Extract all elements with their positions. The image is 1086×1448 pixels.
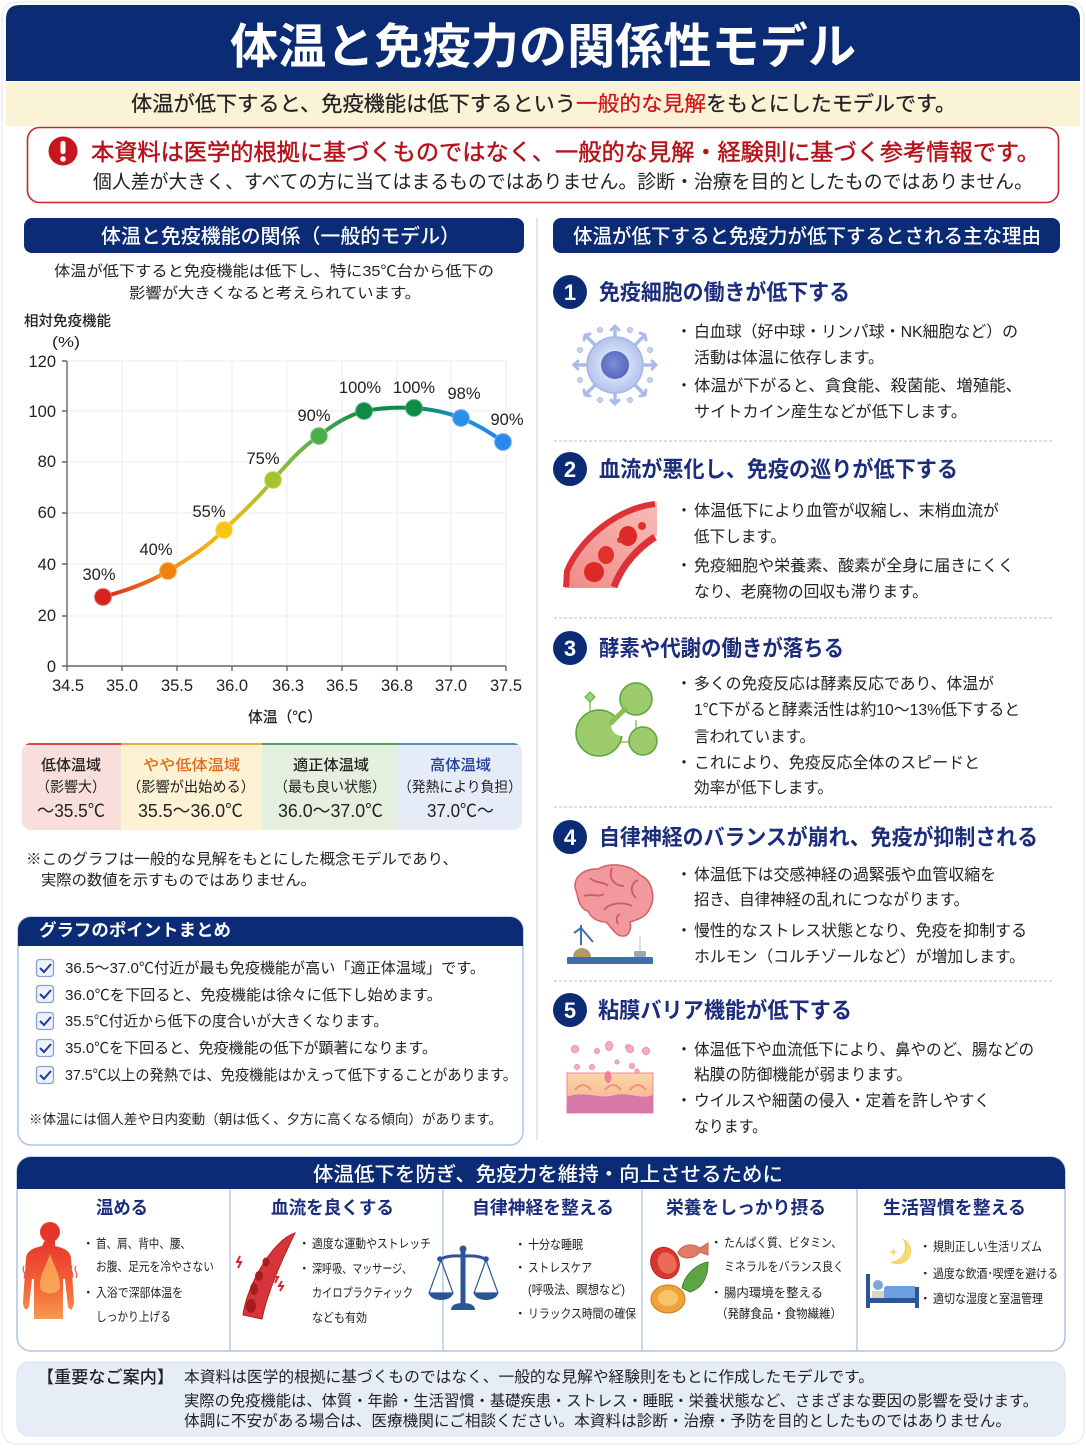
- zone: low: （影響大）: [36, 779, 106, 796]
- title banner: [6, 5, 1080, 81]
- column: nutrition: [646, 1197, 844, 1321]
- reason text: ホルモン（コルチゾールなど）が増加します。: [694, 948, 1025, 966]
- column: warm: 首、肩、背中、腰、: [96, 1236, 191, 1251]
- reason text: ・: [676, 867, 692, 884]
- reason text: [676, 1041, 1034, 1136]
- checklist: 37.5℃以上の発熱では、免疫機能はかえって低下することがあります。: [65, 1067, 517, 1084]
- x axis labels: 36.3: [272, 677, 304, 695]
- number badge: 5: [564, 998, 576, 1023]
- icon: exclamation: [48, 136, 78, 166]
- column: circulation: [237, 1198, 431, 1325]
- column: lifestyle: 規則正しい生活リズム: [933, 1239, 1042, 1254]
- y axis labels: 100: [28, 403, 56, 421]
- panel: left heading: [24, 218, 524, 253]
- checklist: 36.0℃を下回ると、免疫機能は徐々に低下し始めます。: [65, 987, 442, 1004]
- reason text: ・: [676, 755, 692, 772]
- reason heading: 血流が悪化し、免疫の巡りが低下する: [599, 457, 958, 482]
- zone: optimal: 36.0～37.0℃: [278, 801, 383, 821]
- notice label: 【重要なご案内】: [37, 1368, 174, 1387]
- column: lifestyle: 過度な飲酒･喫煙を避ける: [933, 1266, 1058, 1281]
- reason text: ・: [676, 558, 692, 575]
- column: circulation: なども有効: [312, 1311, 367, 1325]
- column: nutrition: たんぱく質、ビタミン、: [724, 1235, 842, 1250]
- reason text: 招き、自律神経の乱れにつながります。: [694, 891, 969, 909]
- x axis labels: 37.0: [435, 677, 467, 695]
- icon: brain: [567, 865, 653, 964]
- reason text: 低下します。: [694, 528, 786, 546]
- subtitle band: をもとにしたモデルです。: [706, 93, 956, 116]
- data labels: 90%: [490, 411, 524, 429]
- reason text: 多くの免疫反応は酵素反応であり、体温が: [694, 675, 994, 693]
- zone: low: 低体温域: [41, 757, 101, 774]
- y axis labels: 60: [38, 504, 56, 522]
- column: warm: [23, 1198, 214, 1324]
- notice text: 体調に不安がある場合は、医療機関にご相談ください。本資料は診断・治療・予防を目的としたものではありません。: [184, 1412, 1011, 1430]
- chart description: 影響が大きくなると考えられています。: [129, 285, 421, 302]
- reason text: 体温低下や血流低下により、鼻やのど、腸などの: [694, 1041, 1034, 1059]
- column: circulation: 深呼吸、マッサージ、: [312, 1262, 412, 1276]
- column: warm: しっかり上げる: [96, 1310, 171, 1324]
- reason text: 慢性的なストレス状態となり、免疫を抑制する: [694, 921, 1027, 940]
- icon: scales: [429, 1246, 498, 1310]
- data labels: 40%: [139, 541, 173, 559]
- icon: food: [646, 1243, 708, 1313]
- reason text: 効率が低下します。: [694, 779, 833, 797]
- icon: enzyme: [576, 683, 657, 756]
- x axis labels: 36.5: [326, 677, 358, 695]
- reason 3: [553, 631, 1020, 797]
- zone: slightly low: （影響が出始める）: [127, 779, 255, 796]
- reason text: ・: [676, 1042, 692, 1059]
- column: circulation: 血流を良くする: [271, 1198, 394, 1218]
- number badge: 1: [564, 280, 576, 305]
- data labels: 75%: [246, 450, 280, 468]
- number badge: [553, 993, 587, 1027]
- chart description: [54, 263, 494, 302]
- chart description: 体温が低下すると免疫機能は低下し、特に35℃台から低下の: [54, 263, 494, 280]
- zone: high: [398, 757, 522, 821]
- number badge: [553, 452, 587, 486]
- reason text: なります。: [694, 1118, 767, 1136]
- column: circulation: 適度な運動やストレッチ: [312, 1236, 431, 1251]
- column: warm: お腹、足元を冷やさない: [96, 1260, 214, 1274]
- y axis labels: 20: [38, 607, 56, 625]
- line chart: [24, 312, 524, 726]
- reason text: 活動は体温に依存します。: [694, 349, 884, 367]
- data labels: 100%: [393, 379, 435, 397]
- reason heading: 免疫細胞の働きが低下する: [599, 280, 850, 305]
- column: autonomic: ・: [514, 1238, 527, 1252]
- column: nutrition: ミネラルをバランス良く: [724, 1259, 844, 1274]
- reason text: 1℃下がると酵素活性は約10～13%低下すると: [694, 701, 1020, 719]
- data labels: 55%: [192, 503, 226, 521]
- data points: [94, 400, 512, 606]
- data labels: 98%: [447, 385, 481, 403]
- icon: mucosa: [567, 1042, 653, 1113]
- reason text: 免疫細胞や栄養素、酸素が全身に届きにくく: [694, 557, 1014, 575]
- reason text: これにより、免疫反応全体のスピードと: [694, 754, 980, 772]
- column: circulation: ・: [298, 1237, 311, 1251]
- y axis labels: 40: [38, 556, 56, 574]
- y axis labels: 80: [38, 453, 56, 471]
- data labels: 100%: [339, 379, 381, 397]
- important notice: [17, 1362, 1065, 1436]
- zone: slightly low: やや低体温域: [143, 757, 240, 774]
- column: autonomic: (呼吸法、瞑想など): [528, 1282, 625, 1297]
- x axis labels: 36.0: [216, 677, 248, 695]
- notice text: [184, 1367, 1038, 1430]
- subtitle band: [6, 82, 1080, 126]
- reason 2: [553, 452, 1014, 601]
- reason text: 白血球（好中球・リンパ球・NK細胞など）の: [694, 323, 1018, 341]
- reason heading: 自律神経のバランスが崩れ、免疫が抑制される: [599, 825, 1038, 850]
- column: nutrition: 栄養をしっかり摂る: [666, 1197, 826, 1218]
- column: warm: ・: [82, 1286, 95, 1300]
- title: 体温と免疫力の関係性モデル: [230, 21, 856, 74]
- x axis title: 体温（℃）: [248, 709, 322, 726]
- x axis labels: 36.8: [381, 677, 413, 695]
- notice text: 実際の免疫機能は、体質・年齢・生活習慣・基礎疾患・ストレス・睡眠・栄養状態など、さまざまな要因の影響を受けます。: [184, 1391, 1038, 1410]
- number badge: [553, 275, 587, 309]
- reason text: 体温低下により血管が収縮し、末梢血流が: [694, 502, 999, 520]
- y axis title: [24, 312, 111, 351]
- icon: blood vessel: [565, 502, 657, 588]
- zone: high: 37.0℃～: [427, 801, 494, 821]
- y axis title: (%): [52, 335, 80, 351]
- y axis labels: 120: [28, 353, 56, 371]
- data labels: 90%: [297, 407, 331, 425]
- column: nutrition: （発酵食品・食物繊維）: [716, 1306, 842, 1321]
- column: lifestyle: ・: [919, 1292, 932, 1306]
- curve: [103, 408, 503, 597]
- reason text: ウイルスや細菌の侵入・定着を許しやすく: [694, 1092, 990, 1110]
- number badge: 4: [564, 825, 577, 850]
- column: circulation: ・: [298, 1262, 311, 1276]
- zone: slightly low: 35.5～36.0℃: [138, 801, 243, 821]
- zone: slightly low: [127, 757, 255, 821]
- column: warm: 温める: [96, 1198, 148, 1218]
- reason text: ・: [676, 324, 692, 341]
- column: autonomic: 自律神経を整える: [472, 1198, 614, 1218]
- column divider: [536, 218, 538, 1140]
- panel: right heading: [553, 218, 1060, 253]
- reason heading: 粘膜バリア機能が低下する: [598, 998, 852, 1023]
- reason text: 体温低下は交感神経の過緊張や血管収縮を: [694, 866, 996, 884]
- number badge: [553, 631, 587, 665]
- x axis labels: [52, 677, 522, 695]
- notice text: 本資料は医学的根拠に基づくものではなく、一般的な見解や経験則をもとに作成したモデルです。: [184, 1367, 874, 1386]
- reason text: 粘膜の防御機能が弱まります。: [694, 1066, 912, 1084]
- reason 5: [553, 993, 1034, 1136]
- column: autonomic: ストレスケア: [528, 1261, 592, 1275]
- chart note: 実際の数値を示すものではありません。: [41, 872, 316, 889]
- zone: low: ～35.5℃: [37, 801, 105, 821]
- number badge: [553, 820, 587, 854]
- reason text: ・: [676, 1093, 692, 1110]
- zone: optimal: [274, 756, 386, 821]
- reason text: [676, 866, 1027, 966]
- reason text: ・: [676, 503, 692, 520]
- column: autonomic: リラックス時間の確保: [528, 1306, 636, 1321]
- reason text: [676, 675, 1020, 797]
- reason text: ・: [676, 378, 692, 395]
- panel: left heading: 体温と免疫機能の関係（一般的モデル）: [101, 224, 460, 248]
- icon: immune cell: [574, 326, 656, 404]
- column: lifestyle: ・: [919, 1240, 932, 1254]
- chart note: ※このグラフは一般的な見解をもとにした概念モデルであり、: [26, 850, 458, 868]
- warning headline: 本資料は医学的根拠に基づくものではなく、一般的な見解・経験則に基づく参考情報です。: [91, 139, 1040, 165]
- reason text: サイトカイン産生などが低下します。: [694, 403, 967, 421]
- checklist: 36.5～37.0℃付近が最も免疫機能が高い「適正体温域」です。: [65, 960, 485, 977]
- reason text: 言われています。: [694, 728, 815, 746]
- x axis labels: 35.5: [161, 677, 193, 695]
- icon: moon and bed: [866, 1239, 919, 1308]
- summary footnote: ※体温には個人差や日内変動（朝は低く、夕方に高くなる傾向）があります。: [29, 1111, 502, 1127]
- x axis labels: 34.5: [52, 677, 84, 695]
- subtitle band: 一般的な見解: [576, 93, 706, 116]
- column: nutrition: ・: [710, 1286, 723, 1300]
- zone: high: （発熱により負担）: [398, 779, 522, 796]
- x axis labels: 37.5: [490, 677, 522, 695]
- checklist: [36, 960, 517, 1084]
- x axis labels: 35.0: [106, 677, 138, 695]
- panel: graph summary: [18, 917, 523, 1145]
- checklist: 35.0℃を下回ると、免疫機能の低下が顕著になります。: [65, 1040, 437, 1057]
- column: autonomic: ・: [514, 1261, 527, 1275]
- y axis labels: [28, 353, 56, 676]
- reason text: 体温が下がると、貪食能、殺菌能、増殖能、: [694, 377, 1022, 395]
- reason text: ・: [676, 676, 692, 693]
- number badge: 3: [564, 636, 576, 661]
- panel: prevention: [17, 1157, 1065, 1351]
- data labels: 30%: [82, 566, 116, 584]
- reason text: なり、老廃物の回収も滞ります。: [694, 583, 928, 601]
- checklist: 35.5℃付近から低下の度合いが大きくなります。: [65, 1013, 388, 1030]
- warning sub text: 個人差が大きく、すべての方に当てはまるものではありません。診断・治療を目的としたものではありません。: [93, 171, 1033, 193]
- reason heading: 酵素や代謝の働きが落ちる: [599, 636, 844, 661]
- summary heading: グラフのポイントまとめ: [39, 920, 231, 940]
- reason 1: [553, 275, 1022, 421]
- zone: optimal: 適正体温域: [293, 756, 369, 774]
- reason 4: [553, 820, 1038, 966]
- temperature zone table: [22, 743, 522, 830]
- subtitle band: 体温が低下すると、免疫機能は低下するという: [131, 93, 576, 116]
- column: nutrition: 腸内環境を整える: [724, 1286, 823, 1300]
- icon: vessel: [237, 1233, 295, 1319]
- y axis labels: 0: [47, 658, 56, 676]
- column: lifestyle: 適切な湿度と室温管理: [933, 1291, 1043, 1306]
- icon: body: [23, 1222, 77, 1319]
- column: autonomic: ・: [514, 1307, 527, 1321]
- panel: right heading: 体温が低下すると免疫力が低下するとされる主な理由: [573, 225, 1041, 248]
- chart note: [26, 850, 458, 889]
- column: nutrition: ・: [710, 1236, 723, 1250]
- column: lifestyle: ・: [919, 1267, 932, 1281]
- warning box: [28, 128, 1058, 202]
- prevention heading: 体温低下を防ぎ、免疫力を維持・向上させるために: [313, 1163, 783, 1186]
- reason text: [676, 323, 1022, 421]
- reason text: [676, 502, 1014, 601]
- data labels: [82, 379, 524, 584]
- column: lifestyle: [866, 1198, 1058, 1308]
- column: autonomic: [429, 1198, 636, 1321]
- column: warm: ・: [82, 1237, 95, 1251]
- column: autonomic: 十分な睡眠: [528, 1238, 583, 1252]
- y axis title: 相対免疫機能: [24, 312, 111, 330]
- column: lifestyle: 生活習慣を整える: [883, 1198, 1026, 1218]
- number badge: 2: [564, 457, 576, 482]
- column: warm: 入浴で深部体温を: [96, 1286, 183, 1300]
- zone: high: 高体温域: [430, 757, 491, 774]
- reason text: ・: [676, 923, 692, 940]
- zone: low: [36, 757, 106, 821]
- column: circulation: カイロプラクティック: [312, 1286, 413, 1300]
- zone: optimal: （最も良い状態）: [274, 779, 386, 796]
